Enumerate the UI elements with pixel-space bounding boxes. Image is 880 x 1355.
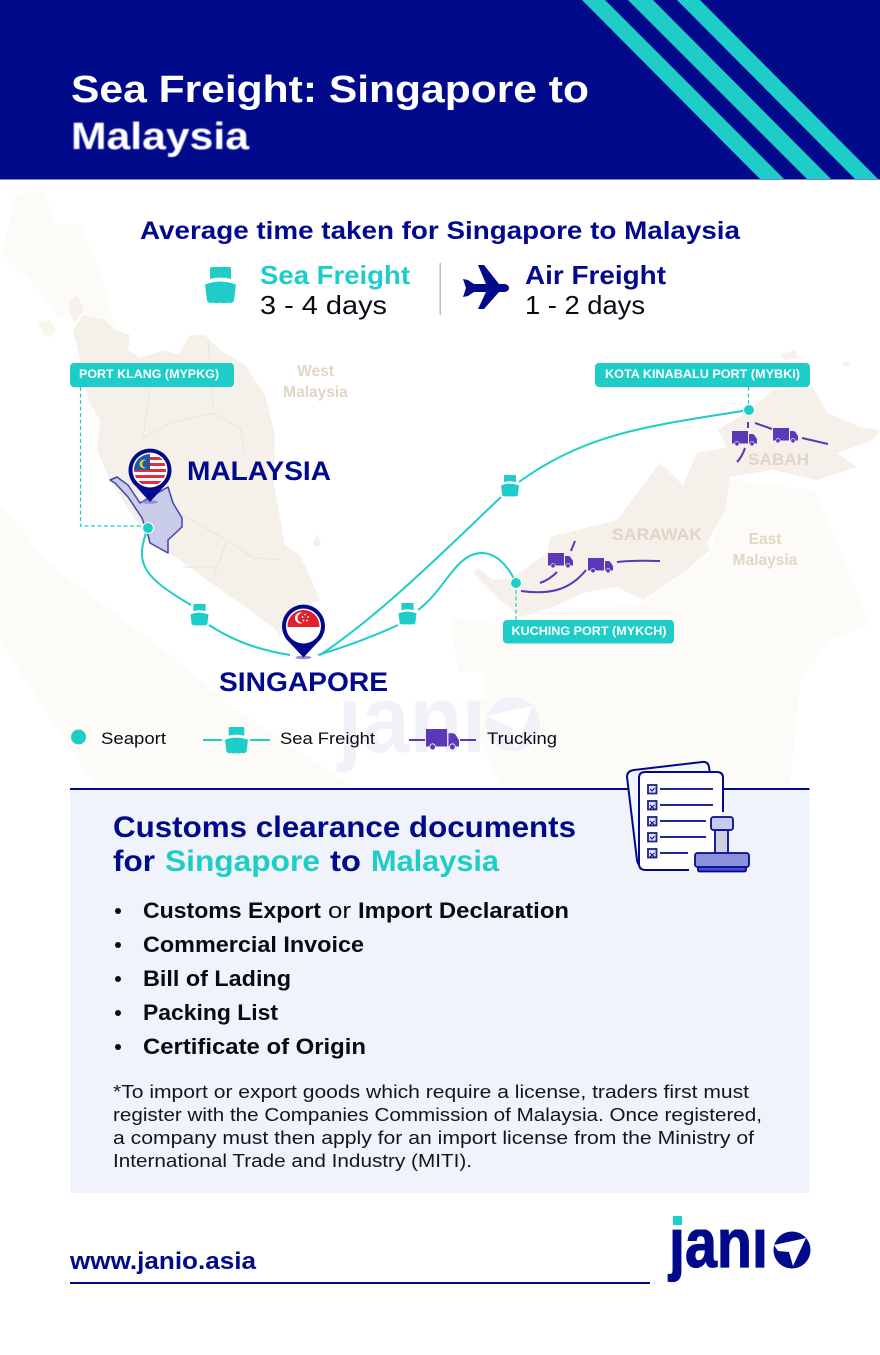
document list: Customs Export xyxy=(143,898,322,923)
header band xyxy=(0,0,880,180)
document list: Import Declaration xyxy=(358,898,569,923)
document list xyxy=(115,898,569,1059)
title xyxy=(71,69,589,158)
port label: Port Klang xyxy=(70,363,234,387)
Selangor highlighted state xyxy=(110,477,182,553)
port label: Kuching: KUCHING PORT (MYKCH) xyxy=(512,626,667,638)
panel heading: for xyxy=(113,845,155,878)
label: MALAYSIA: MALAYSIA xyxy=(187,456,331,486)
sea freight time: 3 - 4 days xyxy=(260,290,387,320)
region labels xyxy=(283,363,809,569)
document list: Bill of Lading xyxy=(143,966,291,991)
legend: trucking: Trucking xyxy=(487,729,557,748)
panel heading xyxy=(113,811,576,878)
region labels: Malaysia xyxy=(733,552,798,569)
title: Malaysia xyxy=(71,116,250,158)
footnote: register with the Companies Commission of Malaysia. Once registered, xyxy=(113,1105,762,1125)
pin: Malaysia xyxy=(128,449,171,504)
icon: plane xyxy=(463,265,509,309)
icon: documents and stamp xyxy=(627,762,749,872)
footnote: *To import or export goods which require a license, traders first must xyxy=(113,1082,749,1102)
panel heading: Singapore xyxy=(165,845,320,878)
port label: Kota Kinabalu: KOTA KINABALU PORT (MYBKI) xyxy=(605,369,800,381)
region labels: SABAH xyxy=(748,451,809,469)
legend: trucking xyxy=(409,729,557,750)
legend: sea freight xyxy=(203,727,375,753)
legend: sea freight: Sea Freight xyxy=(280,729,375,748)
region labels: Malaysia xyxy=(283,384,348,401)
subheading: Average time taken for Singapore to Malaysia xyxy=(140,217,741,245)
document list: Certificate of Origin xyxy=(143,1034,366,1059)
document list: or xyxy=(328,898,351,923)
janio logo: jani xyxy=(667,1204,768,1282)
region labels: East xyxy=(749,531,781,548)
label: SINGAPORE: SINGAPORE xyxy=(219,667,388,697)
air freight time: Air Freight xyxy=(525,260,666,290)
sea routes xyxy=(142,410,748,655)
legend xyxy=(71,727,557,753)
port label: Port Klang: PORT KLANG (MYPKG) xyxy=(79,369,219,381)
document list: Commercial Invoice xyxy=(143,932,364,957)
website url: www.janio.asia xyxy=(69,1248,257,1275)
sea freight time: Sea Freight xyxy=(260,260,410,290)
region labels: West xyxy=(297,363,334,380)
port label: Kota Kinabalu xyxy=(595,363,810,387)
document list: Packing List xyxy=(143,1000,279,1025)
trucks xyxy=(548,428,798,573)
port label: Kuching xyxy=(503,620,674,644)
ships on routes xyxy=(190,475,519,626)
dashed connectors xyxy=(80,387,748,620)
footnote xyxy=(113,1082,762,1171)
background map xyxy=(0,190,880,785)
seaport dots xyxy=(142,404,754,588)
icon: ship xyxy=(205,267,236,303)
watermark logo: jani xyxy=(336,666,486,773)
trucking routes xyxy=(521,422,828,592)
title: Sea Freight: Singapore to xyxy=(71,69,589,111)
air freight time xyxy=(463,260,666,320)
footnote: International Trade and Industry (MITI). xyxy=(113,1151,472,1171)
pin: Singapore xyxy=(282,605,325,659)
panel heading: Customs clearance documents xyxy=(113,811,576,844)
header stripes xyxy=(582,0,878,179)
legend: seaport: Seaport xyxy=(101,729,166,748)
panel heading: Malaysia xyxy=(371,845,499,878)
sea freight time xyxy=(205,260,410,320)
air freight time: 1 - 2 days xyxy=(525,290,645,320)
panel: customs documents xyxy=(70,762,810,1193)
region labels: SARAWAK xyxy=(612,526,702,544)
legend: seaport xyxy=(71,729,166,748)
panel heading: to xyxy=(330,845,361,878)
footnote: a company must then apply for an import license from the Ministry of xyxy=(113,1128,755,1148)
